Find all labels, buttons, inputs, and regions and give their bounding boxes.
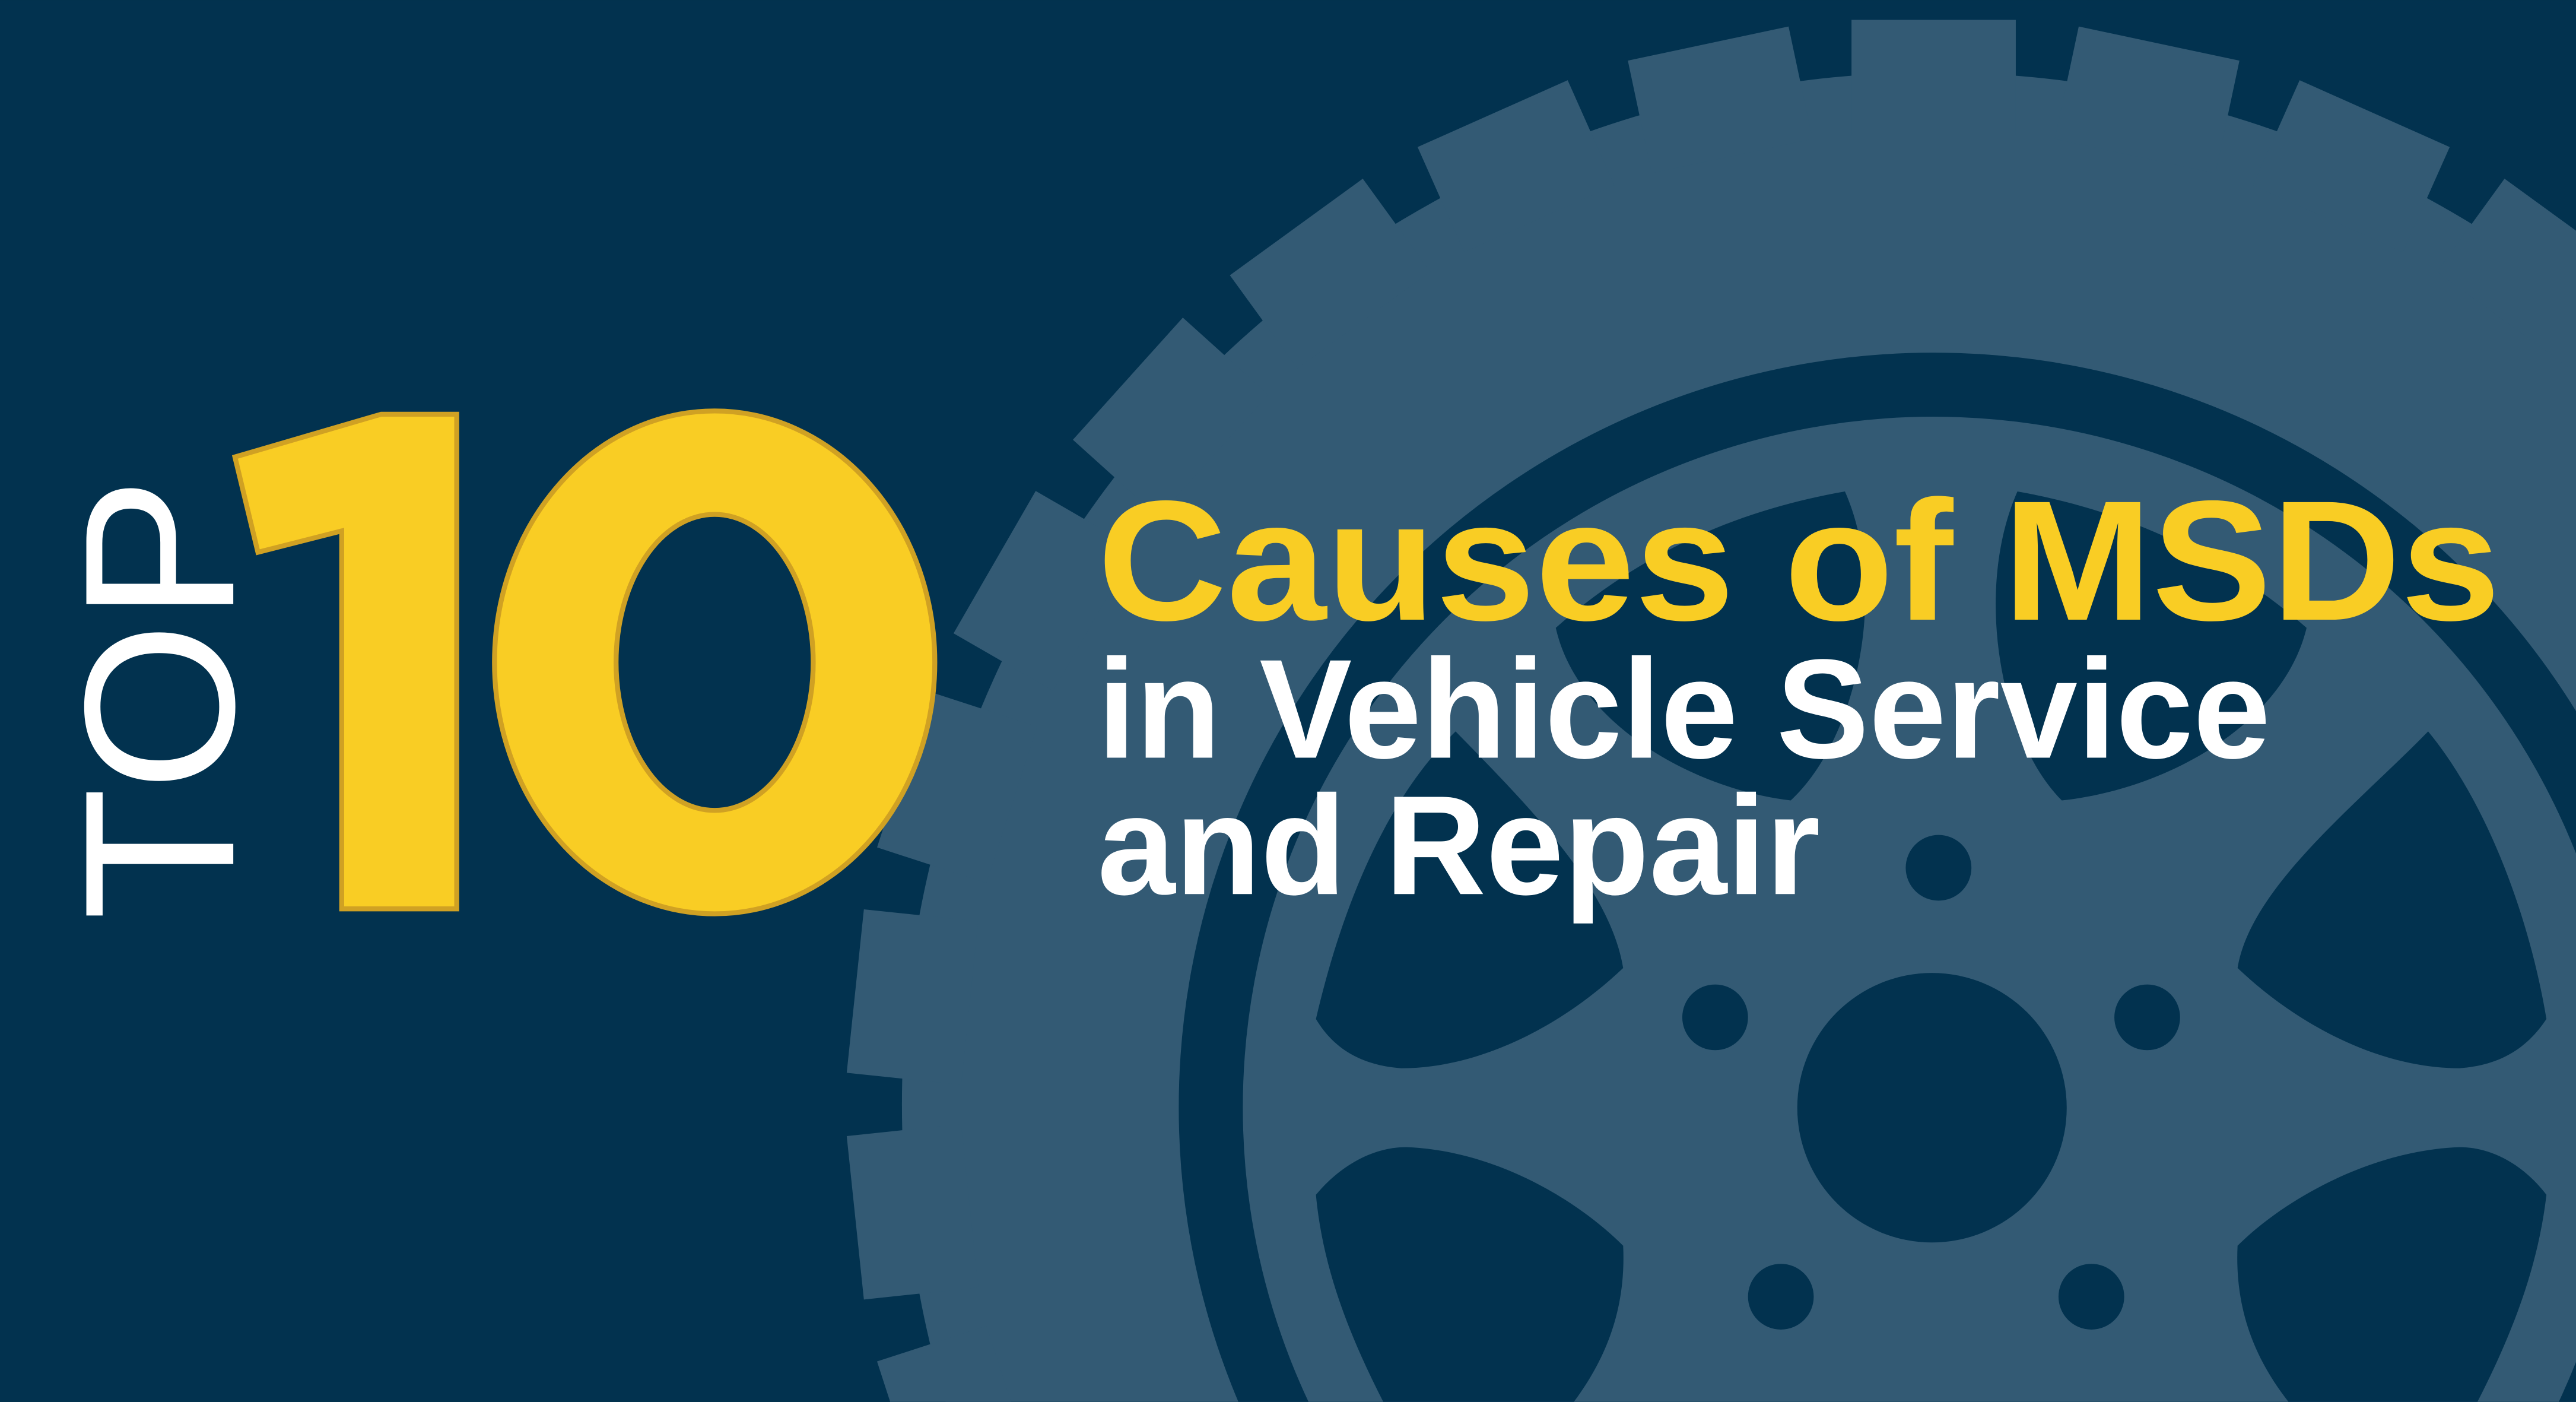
digit 1 bbox=[235, 414, 457, 909]
tire body bbox=[902, 72, 2576, 1402]
title line 1: Causes of MSDs bbox=[1097, 465, 2501, 656]
bolt holes bbox=[1682, 835, 2180, 1330]
TOP vertical label: TOP bbox=[40, 477, 279, 921]
tread blocks bbox=[847, 20, 2576, 1402]
title line 3: and Repair bbox=[1097, 766, 1820, 924]
tire graphic bbox=[847, 20, 2576, 1402]
hub bbox=[1797, 973, 2067, 1242]
title bbox=[1097, 465, 2501, 924]
digit 0 bbox=[494, 411, 935, 914]
rim dark ring bbox=[1211, 385, 2576, 1402]
title line 2: in Vehicle Service bbox=[1097, 630, 2270, 788]
big number 10 bbox=[235, 411, 935, 914]
wheel windows bbox=[1316, 491, 2546, 1402]
